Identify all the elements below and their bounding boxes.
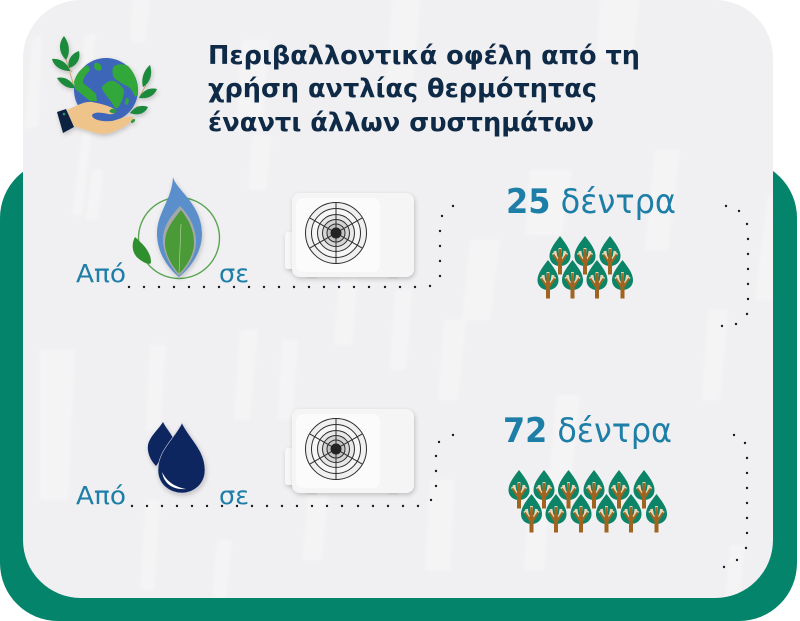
title: έναντι άλλων συστημάτων: [208, 108, 594, 138]
icon: heat pump outdoor unit: [285, 409, 414, 495]
title: Περιβαλλοντικά οφέλη από τη: [208, 41, 640, 71]
label: from: Από: [76, 259, 126, 288]
icon: globe held by a hand with leaves: [52, 36, 157, 134]
icon: natural gas flame with leaf: [133, 177, 220, 278]
icon: group of 12 trees: [508, 470, 667, 532]
title: [208, 41, 640, 138]
row 1: from gas to heat pump: [76, 177, 749, 327]
result: 72 trees: 72 δέντρα: [503, 411, 672, 451]
icon: group of 7 trees: [538, 236, 633, 298]
green background frame: [0, 160, 797, 621]
row 2: from oil to heat pump: [76, 409, 748, 568]
label: to: σε: [219, 481, 249, 510]
title: χρήση αντλίας θερμότητας: [208, 74, 597, 104]
dotted connector: [131, 434, 454, 507]
icon: heat pump outdoor unit: [285, 193, 414, 279]
dotted connector: [128, 205, 454, 288]
label: from: Από: [76, 481, 126, 510]
label: to: σε: [219, 259, 249, 288]
dotted bracket: [723, 434, 748, 568]
result: 25 trees: 25 δέντρα: [506, 182, 676, 222]
dotted bracket: [721, 205, 749, 327]
icon: oil drops: [148, 422, 205, 493]
